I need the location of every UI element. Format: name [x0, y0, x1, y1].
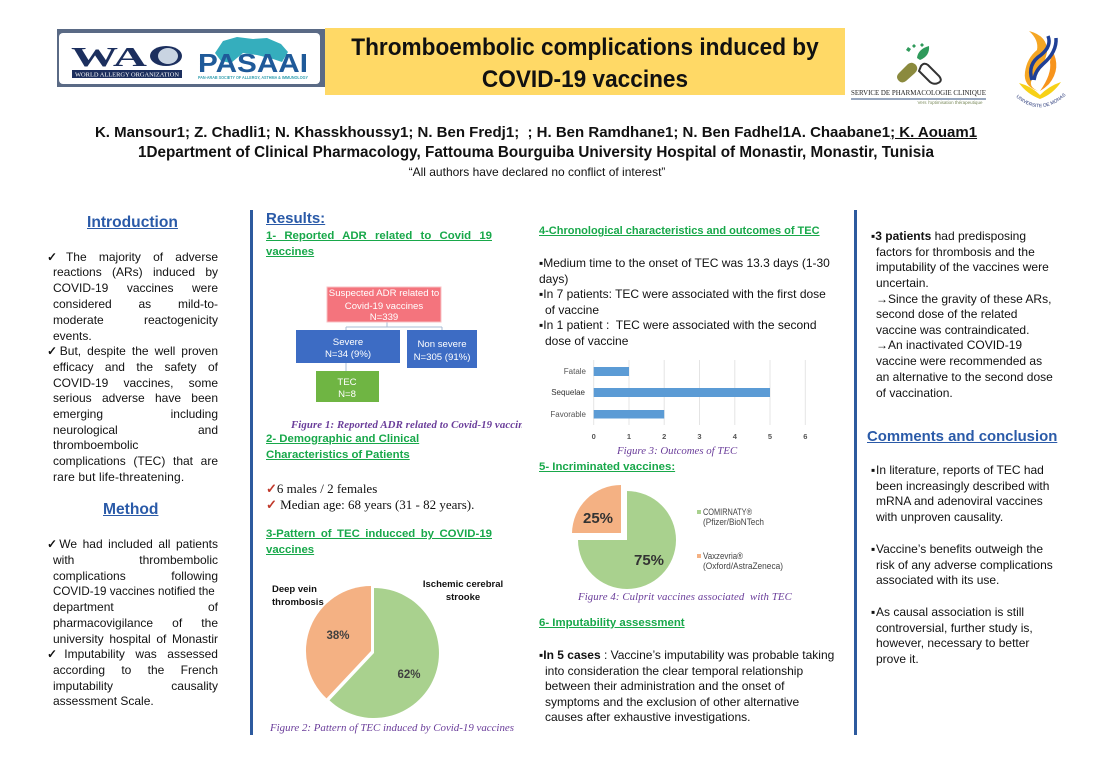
pie chart: pattern of TEC: Ischemic cerebral — [423, 579, 503, 590]
org chart: reported ADR: N=34 (9%) — [325, 349, 371, 360]
bar chart: outcomes of TEC: 5 — [768, 432, 772, 441]
pie chart: pattern of TEC: 38% — [326, 630, 350, 642]
section 3 heading: 3-Pattern of TEC inducced by COVID-19 — [266, 528, 492, 540]
panel: method: pharmacovigilance of the — [53, 616, 218, 630]
demographics: ✓6 males / 2 females — [266, 481, 377, 496]
panel: method: assessment Scale. — [53, 694, 154, 708]
org chart: reported ADR: Severe — [333, 337, 363, 348]
panel: introduction: serious adverse have been — [53, 391, 218, 405]
bar chart: outcomes of TEC: 0 — [592, 432, 596, 441]
demographics: ✓ Median age: 68 years (31 - 82 years). — [266, 497, 474, 512]
org chart: reported ADR — [296, 286, 477, 402]
chronological findings: ▪In 7 patients: TEC were associated with the first dose — [539, 287, 826, 301]
panel: method: ✓We had included all patients — [47, 537, 218, 551]
bar chart: outcomes of TEC: 6 — [803, 432, 807, 441]
panel: comments and conclusion: ▪ — [871, 542, 875, 556]
panel: comments and conclusion: ▪ — [871, 463, 875, 477]
panel: introduction: emerging including — [53, 407, 218, 421]
chronological findings: days) — [539, 272, 568, 286]
panel: introduction: considered as mild-to- — [53, 297, 218, 311]
imputability text: between their administration and the onset of — [545, 679, 784, 693]
authors: K. Mansour1; Z. Chadli1; N. Khasskhoussy1; N. Ben Fredj1; ; H. Ben Ramdhane1; N. Ben Fadhel1A. Chaabane1; K. Aouam1 — [95, 124, 977, 141]
imputability text: into consideration the clear temporal relationship — [545, 664, 803, 678]
bar chart: outcomes of TEC — [550, 360, 808, 441]
section 2 heading: 2- Demographic and Clinical — [266, 433, 419, 445]
imputability text: ▪In 5 cases : Vaccine’s imputability was probable taking — [539, 648, 834, 662]
bar chart: outcomes of TEC: Fatale — [564, 367, 587, 376]
panel: predisposing factors: vaccine was contraindicated. — [876, 323, 1029, 337]
panel: predisposing factors: imputability of the vaccines were — [876, 260, 1049, 274]
panel: method: COVID-19 vaccines notified the — [53, 585, 215, 598]
imputability text: causes after exhaustive investigations. — [545, 710, 750, 724]
panel: predisposing factors: →An inactivated COVID-19 — [876, 338, 1022, 352]
panel: predisposing factors: second dose of the related — [876, 307, 1017, 321]
header logos: WAO and PASAAI: PASAAI — [198, 48, 308, 78]
affiliation: 1Department of Clinical Pharmacology, Fattouma Bourguiba University Hospital of Monastir, Monastir, Tunisia — [138, 144, 934, 161]
chronological findings: ▪Medium time to the onset of TEC was 13.3 days (1-30 — [539, 256, 830, 270]
heading: introduction: Introduction — [87, 214, 178, 231]
section 6 heading: 6- Imputability assessment — [539, 617, 685, 629]
panel: introduction: reactions (ARs) induced by — [53, 265, 218, 279]
panel: predisposing factors: ▪3 patients had predisposing — [871, 229, 1026, 243]
panel: comments and conclusion: As causal association is still — [876, 605, 1024, 619]
panel: comments and conclusion: Vaccine’s benefits outweigh the — [876, 542, 1043, 556]
chronological findings: of vaccine — [545, 303, 599, 317]
header logos: WAO and PASAAI: PAN-ARAB SOCIETY OF ALLERGY, ASTHMA & IMMUNOLOGY — [198, 75, 308, 80]
pie chart: culprit vaccines: COMIRNATY® — [703, 507, 752, 517]
panel: introduction: events. — [53, 329, 92, 343]
heading: results: Results: — [266, 210, 325, 227]
panel: introduction: ✓But, despite the well proven — [47, 344, 218, 358]
heading: method: Method — [103, 501, 158, 518]
panel: predisposing factors: an alternative to the second dose — [876, 370, 1053, 384]
panel: comments and conclusion: mRNA and adenoviral vaccines — [876, 494, 1043, 508]
panel: method: imputability causality — [53, 679, 218, 693]
panel: introduction: efficacy and the safety of — [53, 360, 218, 374]
org chart: reported ADR: N=305 (91%) — [414, 352, 470, 363]
panel: predisposing factors: factors for thrombosis and the — [876, 245, 1035, 259]
logo: Service de pharmacologie clinique: Vers l'optimisation thérapeutique — [918, 100, 983, 105]
org chart: reported ADR: N=8 — [338, 389, 356, 400]
panel: introduction: complications (TEC) that are — [53, 454, 218, 468]
pie chart: culprit vaccines: 75% — [634, 552, 664, 569]
header logos: WAO and PASAAI: WA — [71, 42, 148, 72]
header logos: WAO and PASAAI: WORLD ALLERGY ORGANIZATION — [75, 72, 180, 78]
panel: predisposing factors: vaccine were recommended as — [876, 354, 1042, 368]
section 2 heading: Characteristics of Patients — [266, 449, 410, 461]
pie chart: culprit vaccines: (Oxford/AstraZeneca) — [703, 561, 783, 571]
panel: introduction — [47, 214, 218, 484]
pie chart: pattern of TEC: Deep vein — [272, 584, 317, 595]
bar chart: outcomes of TEC: Favorable — [550, 410, 587, 419]
conflict of interest statement: “All authors have declared no conflict of interest” — [409, 165, 665, 179]
pie chart: culprit vaccines: (Pfizer/BioNTech — [703, 517, 764, 527]
org chart: reported ADR: Suspected ADR related to — [329, 288, 439, 299]
panel: predisposing factors — [871, 229, 1053, 400]
panel: introduction: ✓The majority of adverse — [47, 250, 218, 264]
section 1 heading — [266, 230, 492, 258]
panel: predisposing factors: uncertain. — [876, 276, 929, 290]
section 4 heading: 4-Chronological characteristics and outcomes of TEC — [539, 225, 820, 237]
heading: comments and conclusion: Comments and conclusion — [867, 429, 1057, 445]
panel: comments and conclusion: ▪ — [871, 605, 875, 619]
bar chart: outcomes of TEC: 1 — [627, 432, 631, 441]
panel: comments and conclusion: controversial, further study is, — [876, 621, 1033, 635]
caption: figure 4: Figure 4: Culprit vaccines associated with TEC — [578, 591, 792, 603]
panel: method: complications following — [53, 569, 218, 583]
chronological findings — [539, 256, 830, 348]
pie chart: pattern of TEC: 62% — [397, 669, 421, 681]
panel: method: ✓Imputability was assessed — [47, 647, 218, 661]
panel: introduction: thromboembolic — [53, 438, 138, 452]
bar chart: outcomes of TEC: 2 — [662, 432, 666, 441]
panel: introduction: rare but life-threatening. — [53, 470, 184, 484]
imputability text: symptoms and the exclusion of other alternative — [545, 695, 799, 709]
panel: introduction: COVID-19 vaccines, some — [53, 376, 218, 390]
caption: figure 2: Figure 2: Pattern of TEC induced by Covid-19 vaccines — [270, 722, 514, 734]
title banner — [325, 28, 845, 95]
divider: left — [250, 210, 253, 735]
org chart: reported ADR: Non severe — [417, 339, 467, 350]
logo: Service de pharmacologie clinique: SERVICE DE PHARMACOLOGIE CLINIQUE — [851, 88, 986, 97]
panel: method: according to the French — [53, 663, 218, 677]
pie chart: pattern of TEC: strooke — [446, 592, 480, 603]
panel: method: department of — [53, 600, 218, 614]
panel: introduction: moderate reactogenicity — [53, 313, 218, 327]
panel: comments and conclusion: In literature, reports of TEC had — [876, 463, 1044, 477]
chronological findings: ▪In 1 patient : TEC were associated with the second — [539, 318, 817, 332]
pie chart: culprit vaccines: 25% — [583, 510, 613, 527]
chronological findings: dose of vaccine — [545, 334, 628, 348]
panel: comments and conclusion: however, necessary to better — [876, 636, 1029, 650]
title — [351, 34, 819, 92]
imputability text — [539, 648, 834, 724]
section 1 heading: vaccines — [266, 246, 314, 258]
pie chart: pattern of TEC: thrombosis — [272, 597, 324, 608]
org chart: reported ADR: Covid-19 vaccines — [345, 301, 423, 312]
section 2 heading — [266, 433, 420, 461]
pie chart: pattern of TEC — [272, 579, 503, 718]
panel: comments and conclusion: prove it. — [876, 652, 919, 666]
demographics — [266, 481, 474, 512]
logo: Université de Monastir: UNIVERSITE DE MONASTIR — [1016, 93, 1066, 108]
bar chart: outcomes of TEC: Sequelae — [551, 388, 586, 397]
bar chart: outcomes of TEC: 4 — [733, 432, 738, 441]
section 5 heading: 5- Incriminated vaccines: — [539, 461, 675, 473]
section 3 heading — [266, 528, 492, 556]
divider: right — [854, 210, 857, 735]
org chart: reported ADR: TEC — [337, 377, 357, 388]
pie chart: culprit vaccines — [572, 485, 783, 589]
section 3 heading: vaccines — [266, 544, 314, 556]
panel: method: university hospital of Monastir — [53, 632, 218, 646]
title: Thromboembolic complications induced by — [351, 34, 819, 61]
bar chart: outcomes of TEC: 3 — [697, 432, 702, 441]
panel: comments and conclusion: risk of any adverse complications — [876, 558, 1053, 572]
panel: comments and conclusion — [871, 463, 1053, 666]
caption: figure 3: Figure 3: Outcomes of TEC — [617, 445, 737, 457]
panel: method — [47, 501, 218, 708]
panel: comments and conclusion: been increasingly described with — [876, 479, 1049, 493]
logo: Service de pharmacologie clinique — [851, 43, 986, 105]
panel: introduction: COVID-19 vaccines were — [53, 281, 218, 295]
org chart: reported ADR: N=339 — [370, 312, 398, 323]
panel: predisposing factors: →Since the gravity of these ARs, — [876, 292, 1051, 306]
panel: introduction: neurological and — [53, 423, 218, 437]
panel: method: with thrombembolic — [53, 553, 218, 567]
panel: comments and conclusion: associated with its use. — [876, 573, 999, 587]
title: COVID-19 vaccines — [482, 66, 688, 92]
pie chart: culprit vaccines: Vaxzevria® — [703, 551, 743, 561]
header logos: WAO and PASAAI — [57, 29, 325, 87]
section 1 heading: 1- Reported ADR related to Covid 19 — [266, 230, 492, 242]
panel: comments and conclusion: with unproven causality. — [876, 510, 1003, 524]
panel: predisposing factors: of vaccination. — [876, 386, 953, 400]
